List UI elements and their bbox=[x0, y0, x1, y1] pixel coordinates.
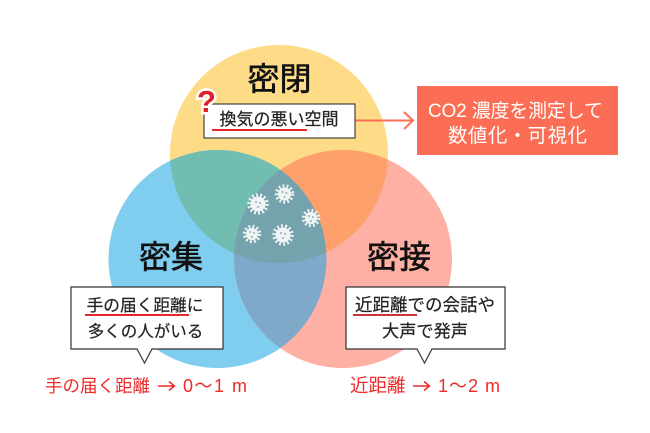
heading: 密接: 密接 bbox=[367, 239, 431, 275]
arrow to CO2 box bbox=[355, 112, 413, 129]
circle: top bbox=[170, 45, 388, 263]
icon: question mark: ? bbox=[197, 84, 216, 119]
venn infographic bbox=[46, 45, 618, 394]
callout text: 換気の悪い空間 bbox=[220, 110, 338, 129]
CO2 box text: CO2 濃度を測定して bbox=[428, 100, 603, 122]
circle: right bbox=[234, 150, 452, 368]
overlap: top and right bbox=[234, 150, 388, 254]
callout: close distance: 大声で発声 bbox=[382, 321, 468, 341]
CO2 box bbox=[417, 86, 618, 155]
distance label: left: 手の届く距離 bbox=[45, 376, 150, 396]
callout: ventilation bbox=[204, 104, 355, 138]
icon: virus 1 bbox=[250, 196, 266, 212]
overlap: centre bbox=[234, 170, 326, 263]
distance label: right bbox=[350, 375, 500, 396]
distance value: 0〜1 m bbox=[183, 376, 247, 396]
distance label: left bbox=[45, 376, 247, 396]
callout text: 手の届く距離に bbox=[87, 296, 203, 315]
heading: 密集: 密集 bbox=[139, 239, 203, 275]
icon: virus 3 bbox=[304, 211, 318, 225]
venn diagram bbox=[108, 45, 452, 368]
icon: virus 5 bbox=[274, 226, 292, 244]
CO2 box: 数値化・可視化 bbox=[448, 125, 587, 147]
heading: 密閉: 密閉 bbox=[247, 61, 312, 97]
callout: within reach bbox=[71, 287, 223, 363]
arrow bbox=[158, 382, 174, 390]
callout: close distance bbox=[346, 287, 505, 363]
virus icons bbox=[245, 186, 318, 244]
circle: left bbox=[108, 150, 326, 368]
icon: virus 4 bbox=[245, 227, 259, 241]
callout: within reach: 多くの人がいる bbox=[88, 322, 203, 341]
icon: virus 2 bbox=[277, 186, 292, 202]
overlap: left and right bbox=[234, 170, 326, 348]
red underline bbox=[212, 129, 307, 131]
red underline bbox=[85, 314, 189, 316]
overlap: top and left bbox=[170, 150, 280, 254]
callout text: 近距離での会話や bbox=[355, 295, 495, 315]
distance value: 1〜2 m bbox=[438, 376, 500, 396]
red underline bbox=[353, 314, 417, 316]
arrow bbox=[413, 382, 430, 390]
distance label: right: 近距離 bbox=[350, 375, 406, 396]
